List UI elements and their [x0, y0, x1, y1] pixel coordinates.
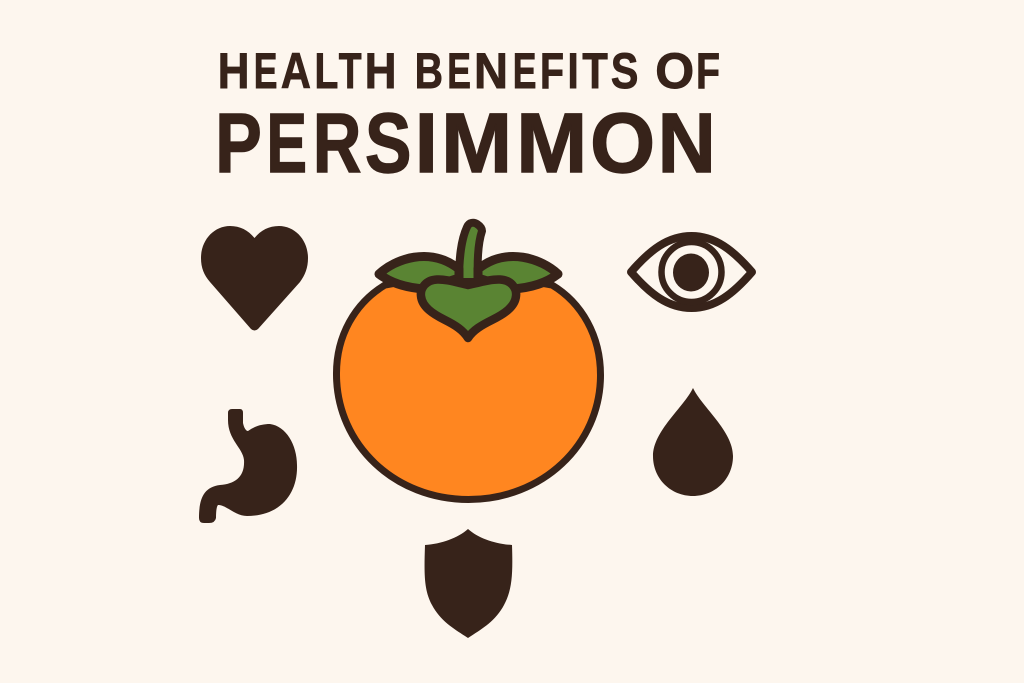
left leaf [379, 256, 459, 289]
title line 1: B [415, 42, 443, 99]
title line 1: F [540, 42, 564, 99]
title line 2: E [266, 96, 307, 190]
title line 1: I [568, 42, 579, 99]
title line 2: M [441, 96, 512, 190]
icon: eye [631, 236, 752, 308]
title line 1: N [474, 42, 508, 99]
title line 1: O [655, 42, 694, 99]
title line 2: O [590, 96, 655, 190]
title line 2: I [415, 96, 438, 190]
right leaf [478, 256, 558, 289]
title line 2: R [313, 96, 361, 190]
title line 1: E [513, 42, 536, 99]
title line 2: N [658, 96, 716, 190]
icon: water drop [653, 388, 733, 496]
persimmon [336, 223, 600, 500]
title line 2: S [365, 96, 411, 190]
centre leaf [421, 279, 516, 338]
title [215, 42, 720, 190]
icon: shield [425, 529, 512, 638]
title line 2: M [516, 96, 587, 190]
title line 2: P [215, 96, 262, 190]
title line 1: E [447, 42, 471, 99]
title line 1: L [314, 42, 338, 99]
title line 1: H [365, 42, 396, 99]
fruit body [336, 270, 600, 500]
title line 1: E [254, 42, 277, 99]
stem [459, 223, 482, 282]
title line 1: H [218, 42, 250, 99]
icon: heart [201, 226, 308, 330]
title line 1: A [281, 42, 311, 99]
title line 1: F [696, 42, 720, 99]
title line 1: S [611, 42, 638, 99]
icon: stomach [199, 409, 297, 523]
title line 1: T [582, 42, 608, 99]
title line 1: T [339, 42, 362, 99]
